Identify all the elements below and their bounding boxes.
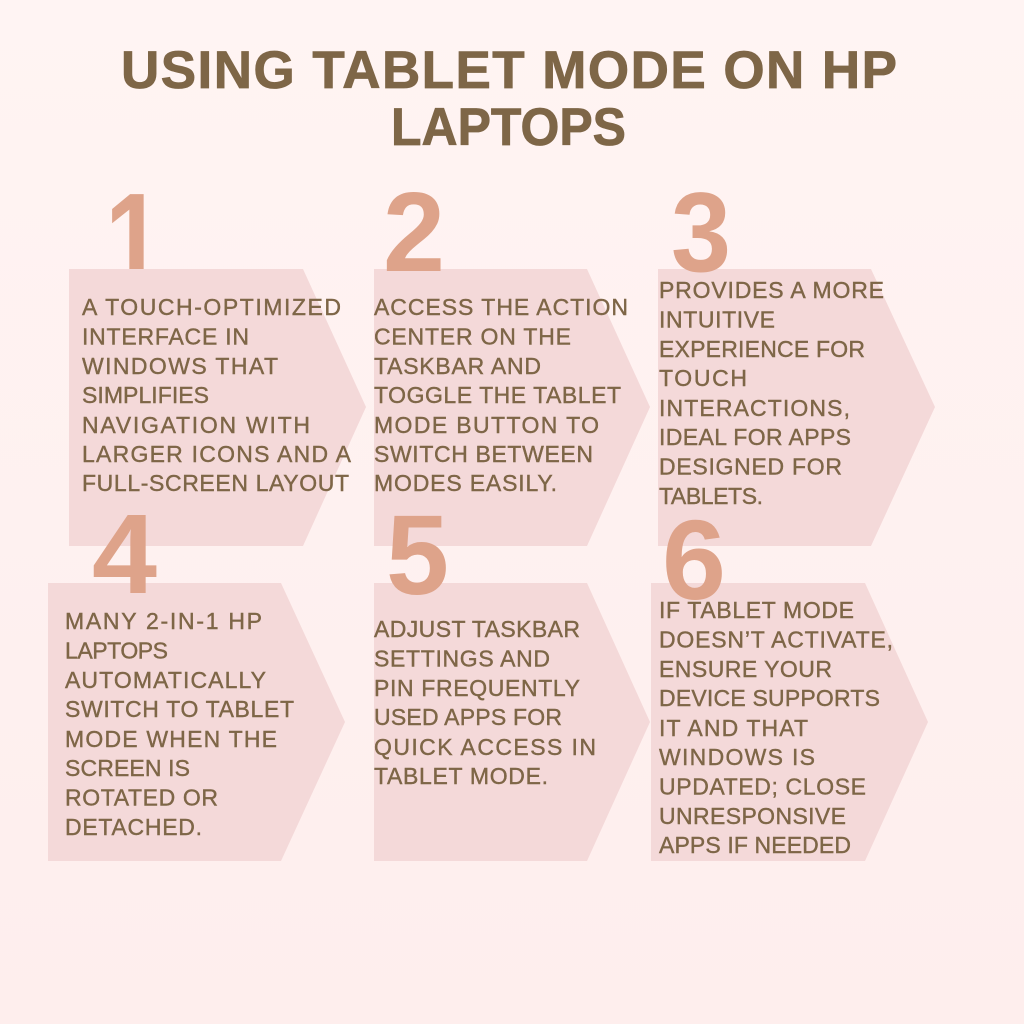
- panel 4: LAPTOPS: [65, 638, 168, 664]
- panel 6: IT AND THAT: [659, 715, 808, 741]
- panel 5: [374, 583, 650, 861]
- panel 2: TOGGLE THE TABLET: [374, 382, 621, 408]
- title: [121, 41, 897, 157]
- panel 6: ENSURE YOUR: [659, 656, 832, 682]
- panel 3: INTERACTIONS,: [659, 395, 850, 421]
- panel 1: INTERFACE IN: [82, 324, 249, 350]
- panel 2: MODE BUTTON TO: [374, 412, 599, 438]
- panel 6: UNRESPONSIVE: [659, 803, 846, 829]
- panel 3: EXPERIENCE FOR: [659, 336, 865, 362]
- panel 1: WINDOWS THAT: [82, 353, 278, 379]
- panel 3: TABLETS.: [659, 483, 763, 509]
- panel 5: SETTINGS AND: [374, 646, 550, 672]
- panel 6: APPS IF NEEDED: [659, 832, 851, 858]
- panel 2: [374, 269, 650, 546]
- panel 3: INTUITIVE: [659, 306, 775, 332]
- panel 2: ACCESS THE ACTION: [374, 294, 628, 320]
- panel 4: SWITCH TO TABLET: [65, 696, 294, 722]
- number 3: 3: [671, 169, 731, 295]
- panel 2: MODES EASILY.: [374, 470, 557, 496]
- number 5: 5: [386, 492, 449, 618]
- panel 2: CENTER ON THE: [374, 324, 571, 350]
- panel 3: IDEAL FOR APPS: [659, 424, 851, 450]
- panel 1: [69, 269, 366, 546]
- panel 4: MANY 2-IN-1 HP: [65, 608, 262, 634]
- panel 4: MODE WHEN THE: [65, 726, 277, 752]
- number 1: 1: [105, 166, 163, 313]
- panel 1: SIMPLIFIES: [82, 382, 209, 408]
- panel 5: PIN FREQUENTLY: [374, 675, 580, 701]
- panel 6: DOESN’T ACTIVATE,: [659, 626, 893, 652]
- panel 4: AUTOMATICALLY: [65, 667, 266, 693]
- title: LAPTOPS: [391, 98, 626, 157]
- number 6: 6: [662, 497, 726, 623]
- panel 4: ROTATED OR: [65, 784, 218, 810]
- panel 6: UPDATED; CLOSE: [659, 774, 866, 800]
- panel 5: TABLET MODE.: [374, 763, 548, 789]
- panel 3: [658, 269, 935, 546]
- panel 1: LARGER ICONS AND A: [82, 441, 352, 467]
- panel 1: A TOUCH-OPTIMIZED: [82, 294, 341, 320]
- panel 6: [651, 583, 928, 861]
- title: USING TABLET MODE ON HP: [121, 41, 897, 100]
- panel 6: DEVICE SUPPORTS: [659, 685, 880, 711]
- panel 3: PROVIDES A MORE: [659, 277, 884, 303]
- panel 3: DESIGNED FOR: [659, 454, 842, 480]
- panel 6: IF TABLET MODE: [659, 597, 854, 623]
- panel 2: SWITCH BETWEEN: [374, 441, 593, 467]
- panel 3: TOUCH: [659, 365, 747, 391]
- panel 1: FULL-SCREEN LAYOUT: [82, 470, 349, 496]
- panel 2: TASKBAR AND: [374, 353, 541, 379]
- panel 5: ADJUST TASKBAR: [374, 616, 580, 642]
- panel 1: NAVIGATION WITH: [82, 412, 310, 438]
- panel 4: SCREEN IS: [65, 755, 190, 781]
- panel 4: DETACHED.: [65, 814, 202, 840]
- number 4: 4: [92, 491, 157, 617]
- panel 4: [48, 583, 345, 861]
- panel 6: WINDOWS IS: [659, 744, 815, 770]
- panel 5: QUICK ACCESS IN: [374, 734, 596, 760]
- number 2: 2: [383, 169, 445, 295]
- panel 5: USED APPS FOR: [374, 704, 562, 730]
